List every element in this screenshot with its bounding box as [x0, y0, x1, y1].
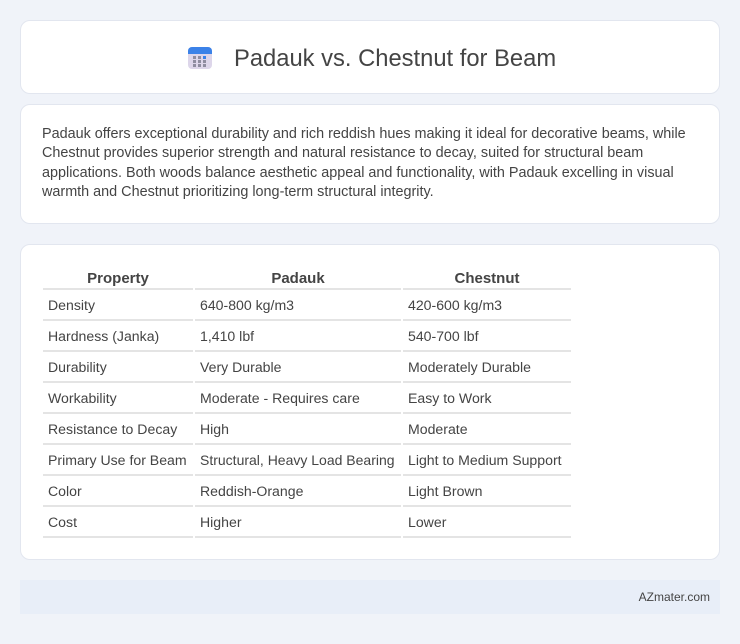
- description text: applications. Both woods balance aesthetic appeal and functionality, with Padauk excelling in visual: [42, 165, 674, 181]
- row: resistance to decay: [48, 421, 468, 437]
- row: primary use: [48, 452, 562, 468]
- row: durability: Very Durable: [200, 359, 281, 375]
- row: density: 420-600 kg/m3: [408, 297, 502, 313]
- description text: Chestnut provides superior strength and natural resistance to decay, suited for structural beam: [42, 145, 643, 161]
- footer bar: [20, 580, 720, 614]
- row: primary use: Light to Medium Support: [408, 452, 562, 468]
- icon: calendar: [188, 47, 212, 69]
- row: durability: Durability: [48, 359, 107, 375]
- row: hardness: 1,410 lbf: [200, 328, 254, 344]
- row: hardness: [48, 328, 479, 344]
- row: durability: Moderately Durable: [408, 359, 531, 375]
- description text: warmth and Chestnut prioritizing long-term structural integrity.: [42, 184, 434, 200]
- description text: [42, 126, 686, 200]
- panel: description card: [20, 104, 720, 224]
- panel: title card: [20, 20, 720, 94]
- table header: Property: [87, 270, 149, 287]
- row: resistance to decay: Moderate: [408, 421, 468, 437]
- row: cost: [48, 514, 446, 530]
- row: cost: Lower: [408, 514, 446, 530]
- row: primary use: Structural, Heavy Load Bearing: [200, 452, 395, 468]
- row: density: [48, 297, 502, 313]
- row: workability: Workability: [48, 390, 117, 406]
- description text: Padauk offers exceptional durability and rich reddish hues making it ideal for decorative beams, while: [42, 126, 686, 142]
- panel: comparison table card: [20, 244, 720, 560]
- table header: Chestnut: [454, 270, 520, 287]
- title: Padauk vs. Chestnut for Beam: [234, 45, 556, 72]
- row: hardness: Hardness (Janka): [48, 328, 159, 344]
- row: primary use: Primary Use for Beam: [48, 452, 187, 468]
- row: color: [48, 483, 482, 499]
- row: hardness: 540-700 lbf: [408, 328, 479, 344]
- row: resistance to decay: High: [200, 421, 229, 437]
- row: color: Light Brown: [408, 483, 482, 499]
- row: color: Color: [48, 483, 82, 499]
- table header: [87, 270, 520, 287]
- row: workability: [48, 390, 492, 406]
- row: durability: [48, 359, 531, 375]
- comparison table: [43, 270, 571, 538]
- row: color: Reddish-Orange: [200, 483, 303, 499]
- row: cost: Higher: [200, 514, 242, 530]
- row: workability: Easy to Work: [408, 390, 492, 406]
- table header: Padauk: [271, 270, 325, 287]
- row: resistance to decay: Resistance to Decay: [48, 421, 177, 437]
- footer source text: AZmater.com: [639, 590, 710, 604]
- row: density: 640-800 kg/m3: [200, 297, 294, 313]
- row: density: Density: [48, 297, 95, 313]
- row: workability: Moderate - Requires care: [200, 390, 360, 406]
- row: cost: Cost: [48, 514, 77, 530]
